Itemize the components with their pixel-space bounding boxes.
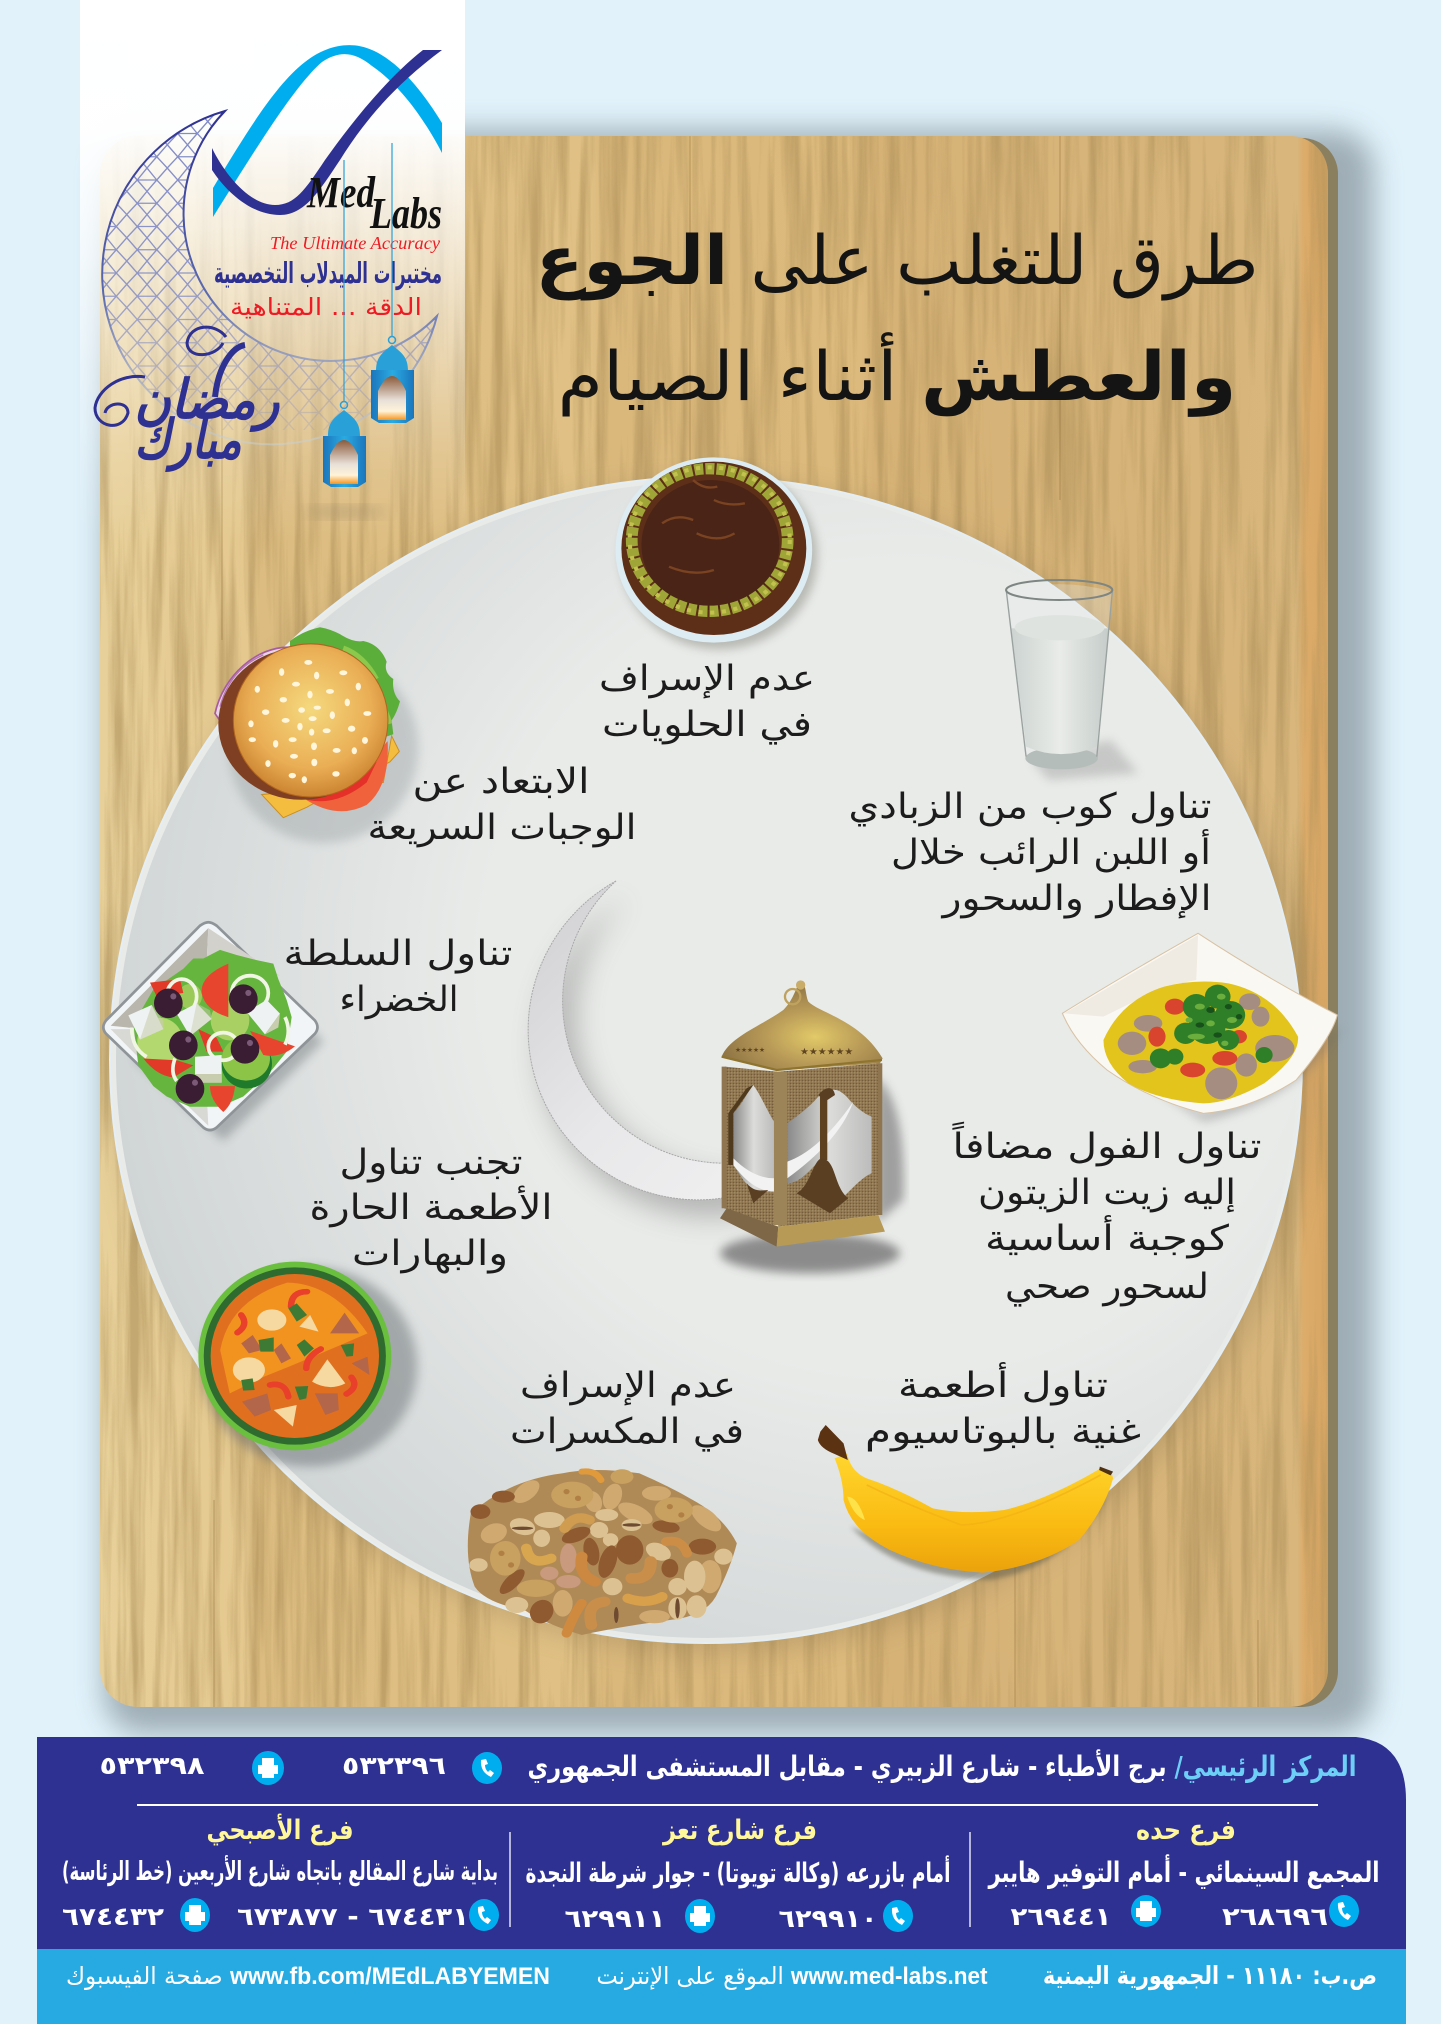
logo: Med Labs: Med <box>306 168 376 217</box>
footer: web and PO box strip: www.med-labs.net الموقع على الإنترنت <box>596 1962 988 1990</box>
logo: Med Labs: مختبرات الميدلاب التخصصية <box>214 256 442 290</box>
caption: beans: كوجبة أساسية <box>985 1215 1229 1259</box>
caption: sweets: عدم الإسراف <box>599 659 815 699</box>
branch: Taiz street: ٦٢٩٩١٠ <box>778 1904 878 1933</box>
icon: golden lantern: ★★★★★★ <box>800 1047 853 1058</box>
branch: Taiz street: ٦٢٩٩١١ <box>564 1904 666 1933</box>
caption: nuts: عدم الإسراف <box>520 1366 736 1406</box>
caption: beans: إليه زيت الزيتون <box>978 1173 1236 1213</box>
icon: banana <box>818 1425 1113 1580</box>
icon: mixed nuts <box>468 1469 737 1635</box>
caption: sweets: في الحلويات <box>602 705 812 745</box>
calligraphy: Ramadan Mubarak: رمضان <box>134 368 280 433</box>
icon: soup bowl <box>198 1262 417 1467</box>
caption: hot food: والبهارات <box>352 1234 508 1274</box>
icon: burger <box>215 627 418 843</box>
icon: crescent moon with geometric pattern <box>102 111 437 444</box>
footer: web and PO box strip <box>37 1949 1406 2024</box>
branch: Asbahi <box>62 1813 499 1932</box>
branch: Taiz street <box>526 1815 950 1933</box>
footer: web and PO box strip: www.fb.com/MEdLABYEMEN صفحة الفيسبوك <box>66 1962 550 1990</box>
logo: Med Labs: The Ultimate Accuracy <box>270 233 440 253</box>
branch: Taiz street: أمام بازرعه (وكالة تويوتا) - جوار شرطة النجدة <box>526 1855 950 1889</box>
caption: beans <box>951 1121 1262 1307</box>
footer: contact panel <box>37 1737 1406 1949</box>
caption: beans: تناول الفول مضافاً <box>951 1121 1262 1167</box>
title: طرق للتغلب على الجوع <box>536 222 1258 301</box>
main centre numbers: ٥٣٢٣٩٨ <box>100 1751 204 1780</box>
caption: nuts: في المكسرات <box>510 1412 744 1452</box>
caption: potassium: تناول أطعمة <box>898 1362 1108 1406</box>
branch: Asbahi: ٦٧٤٤٣١ - ٦٧٣٨٧٧ <box>237 1902 469 1931</box>
caption: yogurt: تناول كوب من الزبادي <box>848 787 1212 827</box>
branch: Haddah: فرع حده <box>1136 1815 1236 1846</box>
logo: Med Labs: الدقة ... المتناهية <box>230 293 422 321</box>
caption: potassium <box>865 1362 1141 1452</box>
caption: beans: لسحور صحي <box>1005 1267 1209 1307</box>
logo: Med Labs <box>212 45 442 321</box>
icon: golden lantern: ★★★★★ <box>735 1046 765 1054</box>
caption: yogurt: الإفطار والسحور <box>940 879 1212 919</box>
calligraphy: Ramadan Mubarak: مبارك <box>134 408 242 473</box>
icon: crescent moon centre <box>528 881 865 1216</box>
icon: hanging lanterns <box>303 143 414 517</box>
caption: salad <box>284 934 512 1020</box>
icon: green salad <box>103 922 323 1141</box>
caption: yogurt <box>848 787 1212 919</box>
caption: potassium: غنية بالبوتاسيوم <box>865 1412 1141 1452</box>
caption: salad: الخضراء <box>340 980 458 1020</box>
wooden board <box>100 130 1374 1734</box>
branch: Haddah <box>987 1815 1380 1931</box>
caption: hot food: تجنب تناول <box>340 1143 522 1183</box>
title: والعطش أثناء الصيام <box>557 332 1236 417</box>
caption: sweets <box>599 659 815 745</box>
branch: Asbahi: فرع الأصبحي <box>206 1813 354 1846</box>
footer: web and PO box strip: ص.ب: ١١١٨٠ - الجمهورية اليمنية <box>1043 1961 1377 1991</box>
branch: Asbahi: ٦٧٤٤٣٢ <box>62 1902 164 1931</box>
icon: foul bowl <box>1062 933 1343 1122</box>
caption: yogurt: أو اللبن الرائب خلال <box>891 829 1211 873</box>
main centre numbers <box>100 1751 502 1785</box>
caption: fast food <box>368 762 636 848</box>
icon: golden lantern <box>720 980 904 1273</box>
caption: nuts <box>510 1366 744 1452</box>
logo: Med Labs: Labs <box>369 189 442 238</box>
calligraphy: Ramadan Mubarak <box>95 327 280 473</box>
caption: fast food: الابتعاد عن <box>412 762 590 802</box>
caption: salad: تناول السلطة <box>284 934 512 974</box>
icon: dessert plate <box>616 457 817 649</box>
main centre address: المركز الرئيسي/ برج الأطباء - شارع الزبيري - مقابل المستشفى الجمهوري <box>527 1749 1356 1784</box>
icon: glass of milk <box>1006 580 1138 780</box>
branch: Asbahi: بداية شارع المقالع باتجاه شارع الأربعين (خط الرئاسة) <box>62 1855 498 1887</box>
branch: Taiz street: فرع شارع تعز <box>661 1815 817 1846</box>
branch: Haddah: ٢٦٩٤٤١ <box>1010 1902 1112 1931</box>
main centre numbers: ٥٣٢٣٩٦ <box>342 1751 446 1780</box>
caption: hot food <box>310 1143 552 1274</box>
title <box>536 222 1258 417</box>
caption: hot food: الأطعمة الحارة <box>310 1185 552 1228</box>
branch: Haddah: ٢٦٨٦٩٦ <box>1222 1902 1328 1931</box>
lantern faces <box>724 1067 777 1225</box>
plate <box>110 477 1308 1651</box>
caption: fast food: الوجبات السريعة <box>368 808 636 848</box>
white logo panel <box>80 0 465 540</box>
